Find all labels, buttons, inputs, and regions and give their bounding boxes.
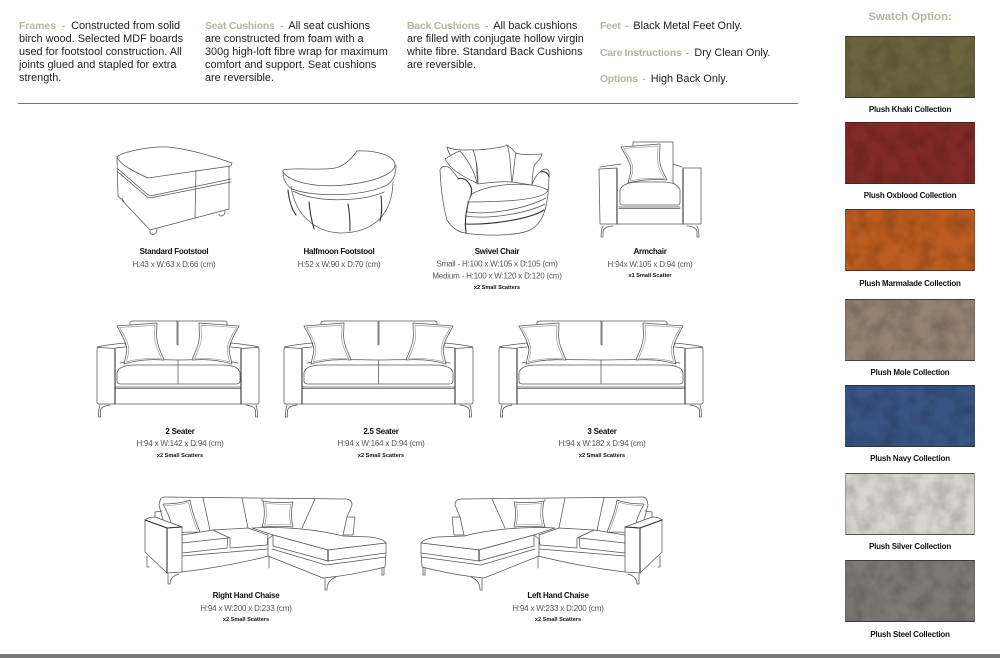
label: armchair scatters: x1 Small Scatter bbox=[628, 273, 672, 279]
label: swivel chair name: Swivel Chair bbox=[475, 247, 519, 256]
text block: feet, care and options: Care Instructions - Dry Clean Only. bbox=[600, 46, 770, 58]
label: armchair name: Armchair bbox=[633, 247, 667, 256]
swatch: navy bbox=[845, 385, 975, 447]
label: left hand chaise name: Left Hand Chaise bbox=[527, 591, 589, 600]
text block: back cushions: are reversible. bbox=[407, 59, 476, 71]
label: 2.5 seater scatters: x2 Small Scatters bbox=[358, 453, 404, 459]
label: left hand chaise size: H:94 x W:233 x D:200 (cm) bbox=[512, 604, 604, 613]
text block: frames: strength. bbox=[19, 72, 61, 84]
text block: frames: used for footstool construction. All bbox=[19, 46, 182, 58]
product: right hand chaise bbox=[145, 497, 386, 623]
product: 3 seater bbox=[499, 321, 703, 459]
icon: standard footstool bbox=[117, 147, 232, 235]
swatch label: mole: Plush Mole Collection bbox=[871, 368, 949, 377]
label: 3 seater name: 3 Seater bbox=[587, 427, 617, 436]
icon: right hand chaise sofa bbox=[145, 497, 386, 590]
swatch: silver bbox=[845, 473, 975, 535]
label: right hand chaise size: H:94 x W:200 x D:233 (cm) bbox=[200, 604, 292, 613]
product: 2.5 seater bbox=[284, 321, 473, 459]
text block: seat cushions: are constructed from foam with a bbox=[205, 33, 364, 45]
icon: 2 seater sofa bbox=[97, 321, 259, 417]
product: left hand chaise bbox=[421, 497, 662, 623]
swatch label: steel: Plush Steel Collection bbox=[870, 630, 950, 639]
label: 2.5 seater name: 2.5 Seater bbox=[363, 427, 399, 436]
label: left hand chaise scatters: x2 Small Scatters bbox=[535, 617, 581, 623]
text block: frames: birch wood. Selected MDF boards bbox=[19, 33, 183, 45]
label: swivel chair scatters: x2 Small Scatters bbox=[474, 285, 520, 291]
swatch: oxblood bbox=[845, 122, 975, 184]
swatch label: oxblood: Plush Oxblood Collection bbox=[864, 191, 956, 200]
icon: armchair bbox=[599, 142, 701, 237]
swatch: khaki bbox=[845, 36, 975, 98]
label: 3 seater scatters: x2 Small Scatters bbox=[579, 453, 625, 459]
swatch: mole bbox=[845, 299, 975, 361]
text block: feet, care and options: Feet - Black Metal Feet Only. bbox=[600, 20, 742, 32]
label: 2 seater name: 2 Seater bbox=[165, 427, 195, 436]
swatch label: navy: Plush Navy Collection bbox=[870, 454, 950, 463]
swatch: steel bbox=[845, 560, 975, 622]
text block: frames: joints glued and stapled for extra bbox=[19, 59, 176, 71]
label: 2 seater scatters: x2 Small Scatters bbox=[157, 453, 203, 459]
text block: feet, care and options bbox=[600, 20, 770, 85]
text block: seat cushions: comfort and support. Seat cushions bbox=[205, 59, 376, 71]
product: 2 seater bbox=[97, 321, 259, 459]
text block: seat cushions: Seat Cushions - All seat cushions bbox=[205, 20, 370, 32]
text block: back cushions: Back Cushions - All back cushions bbox=[407, 20, 577, 32]
product: swivel chair bbox=[432, 145, 562, 291]
label: 2 seater size: H:94 x W:142 x D:94 (cm) bbox=[136, 439, 224, 448]
label: halfmoon footstool size: H:52 x W:90 x D:70 (cm) bbox=[298, 260, 381, 269]
label: 2.5 seater size: H:94 x W:164 x D:94 (cm) bbox=[337, 439, 425, 448]
text block: back cushions: white fibre. Standard Back Cushions bbox=[407, 46, 583, 58]
label: armchair size: H:94x W:105 x D:94 (cm) bbox=[607, 260, 693, 269]
product: halfmoon footstool bbox=[283, 151, 396, 269]
swatch fabric texture bbox=[846, 37, 974, 621]
text block: seat cushions: 300g high-loft fibre wrap for maximum bbox=[205, 46, 388, 58]
label: halfmoon footstool name: Halfmoon Footstool bbox=[303, 247, 375, 256]
text block: back cushions bbox=[407, 20, 584, 71]
icon: 3 seater sofa bbox=[499, 321, 703, 417]
text block: frames: Frames - Constructed from solid bbox=[19, 20, 180, 32]
label: 3 seater size: H:94 x W:182 x D:94 (cm) bbox=[558, 439, 646, 448]
text block: back cushions: are filled with conjugate hollow virgin bbox=[407, 33, 584, 45]
icon: left hand chaise sofa bbox=[421, 497, 662, 590]
icon: 2.5 seater sofa bbox=[284, 321, 473, 417]
swatch: marmalade bbox=[845, 209, 975, 271]
label: swivel chair small size: Small - H:100 x W:105 x D:105 (cm) bbox=[436, 260, 558, 268]
product: standard footstool bbox=[117, 147, 232, 269]
icon: swivel chair bbox=[440, 145, 549, 235]
swatch heading: Swatch Option: bbox=[868, 11, 952, 23]
text block: feet, care and options: Options - High Back Only. bbox=[600, 73, 728, 85]
swatch label: silver: Plush Silver Collection bbox=[869, 542, 951, 551]
text block: seat cushions bbox=[205, 20, 388, 84]
label: swivel chair medium size: Medium - H:100 x W:120 x D:120 (cm) bbox=[432, 272, 562, 280]
label: standard footstool size: H:43 x W:63 x D:66 (cm) bbox=[133, 260, 216, 269]
swatch label: marmalade: Plush Marmalade Collection bbox=[859, 279, 961, 288]
text block: seat cushions: are reversible. bbox=[205, 72, 274, 84]
bottom bar bbox=[0, 654, 1000, 658]
label: right hand chaise name: Right Hand Chaise bbox=[213, 591, 280, 600]
label: right hand chaise scatters: x2 Small Scatters bbox=[223, 617, 269, 623]
text block: frames bbox=[18, 20, 183, 84]
swatch label: khaki: Plush Khaki Collection bbox=[869, 105, 951, 114]
product: armchair bbox=[599, 142, 701, 279]
label: standard footstool name: Standard Footstool bbox=[140, 247, 208, 256]
icon: halfmoon footstool bbox=[283, 151, 396, 233]
